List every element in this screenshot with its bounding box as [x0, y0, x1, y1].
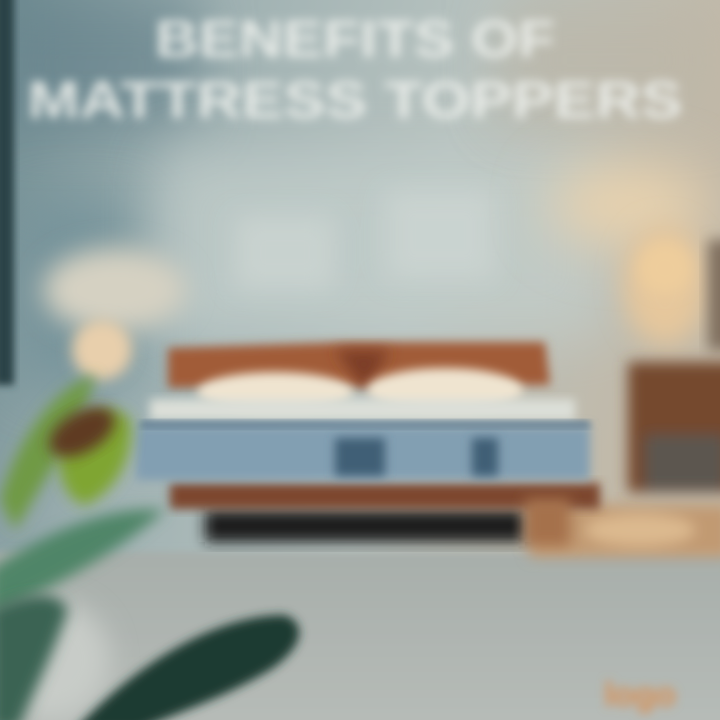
dark left window frame: [0, 0, 14, 385]
plant leaves: [0, 375, 299, 720]
mattress side: [136, 426, 590, 480]
bed frame base: [170, 483, 600, 509]
headboard: [168, 342, 550, 388]
title line 2: MATTRESS TOPPERS: [28, 71, 682, 130]
mattress top: [150, 399, 575, 421]
floor: [0, 552, 720, 720]
mattress handles: [335, 438, 498, 476]
mattress band: [140, 421, 590, 428]
bed: [136, 342, 600, 546]
title line 1: BENEFITS OF: [155, 10, 555, 69]
bed leg: [525, 498, 570, 546]
right pillow: [367, 368, 523, 412]
lighter floor patch: [0, 600, 110, 720]
wall panels: [235, 190, 495, 290]
headboard shadow: [335, 350, 390, 390]
bedside table: [628, 362, 720, 492]
right wall lamp glow: [550, 163, 720, 350]
shadow under bed: [205, 510, 525, 542]
warm wood floor reflection: [530, 505, 720, 557]
left lamp glow: [43, 248, 187, 380]
title: [28, 10, 682, 130]
left pillow: [197, 372, 353, 412]
wall background: [0, 0, 720, 570]
watermark: logo: [604, 676, 676, 714]
